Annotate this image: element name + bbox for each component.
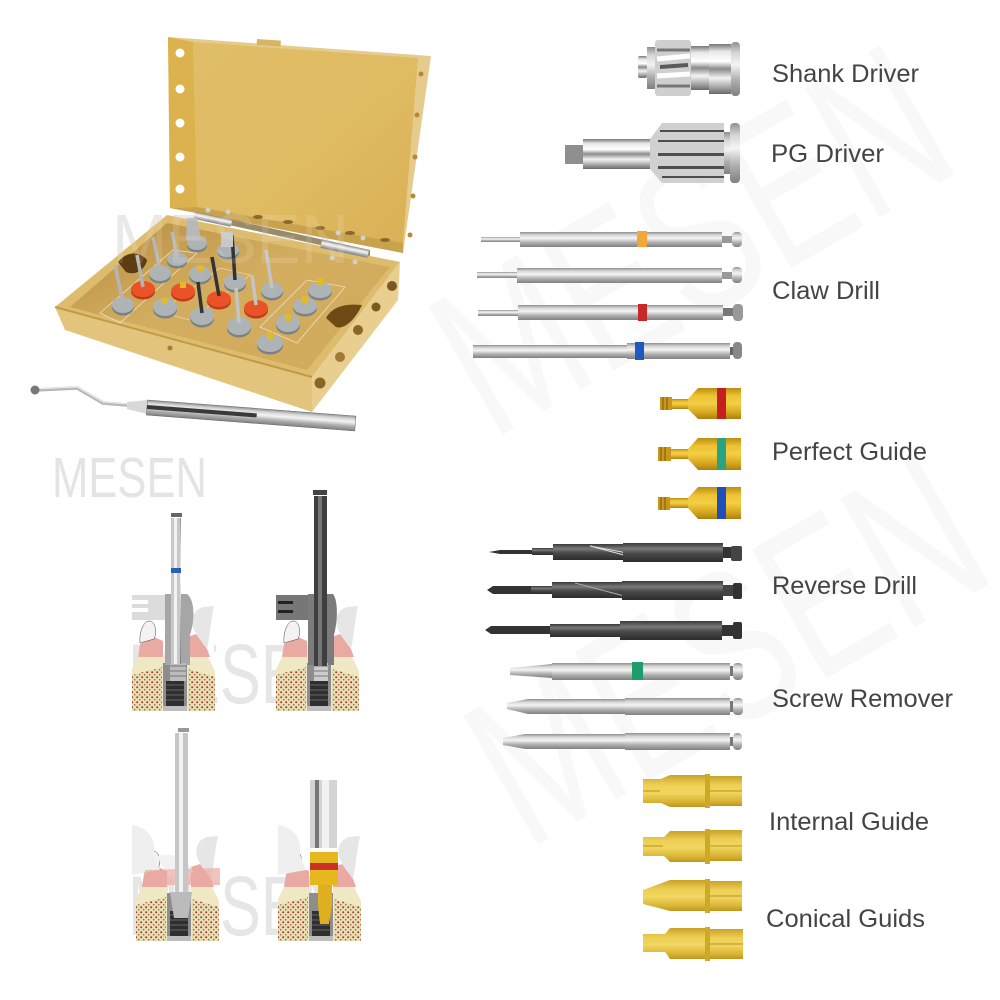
- watermark: MESEN photos lower: MESEN: [128, 859, 346, 953]
- label: Claw Drill: Claw Drill: [772, 277, 880, 305]
- photo: dark drill in guide: [276, 490, 359, 711]
- tray discs and tools: [112, 218, 332, 354]
- label: Reverse Drill: Reverse Drill: [772, 572, 917, 600]
- screw remover set: [503, 662, 743, 750]
- internal guide set: [643, 774, 742, 864]
- label: Shank Driver: Shank Driver: [772, 60, 919, 88]
- box lid: [168, 37, 431, 253]
- reverse drill set: [485, 543, 742, 640]
- label: Screw Remover: Screw Remover: [772, 685, 953, 713]
- photo: gold guide in implant: [278, 780, 361, 941]
- photo: silver screw remover in implant: [132, 728, 220, 941]
- watermark: MESEN photos upper: MESEN: [128, 627, 346, 721]
- watermark: MESEN over box: MESEN: [112, 200, 349, 278]
- hinge bar: [194, 208, 370, 264]
- label: Conical Guids: Conical Guids: [766, 905, 925, 933]
- watermark: MESEN behind box: MESEN: [112, 200, 349, 278]
- label: Perfect Guide: Perfect Guide: [772, 438, 927, 466]
- claw drill set: [473, 231, 743, 360]
- shank driver icon: [638, 40, 740, 96]
- box base: [55, 215, 400, 412]
- bone handle instrument: [30, 386, 356, 431]
- PG driver icon: [565, 123, 740, 183]
- label: Internal Guide: Internal Guide: [769, 808, 929, 836]
- conical guide set: [643, 879, 743, 961]
- photo: blue drill in guide: [132, 513, 215, 711]
- watermark: MESEN left: MESEN: [52, 446, 207, 510]
- perfect guide set: [658, 388, 741, 519]
- label: PG Driver: PG Driver: [771, 140, 884, 168]
- gold instrument box: [55, 37, 431, 412]
